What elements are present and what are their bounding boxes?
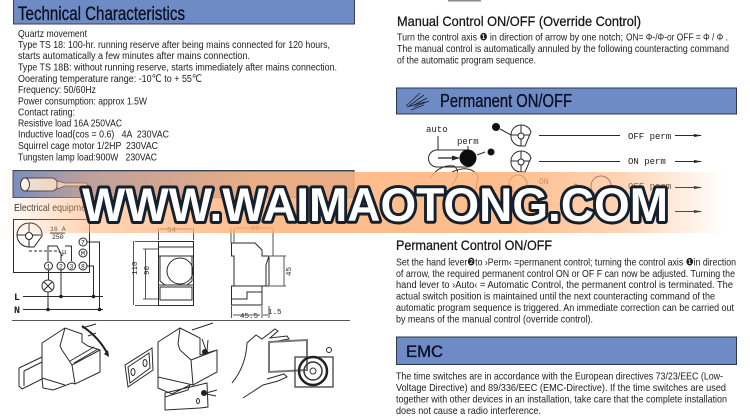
text block: specifications: Contact rating: bbox=[18, 106, 75, 118]
panel: manual control bbox=[397, 13, 729, 66]
panel: EMC bbox=[396, 337, 736, 417]
panel: electrical equipment bbox=[12, 170, 354, 410]
panel: permanent control bbox=[396, 237, 736, 326]
dimension drawing: side view: 1.5 bbox=[268, 309, 282, 317]
wiring diagram: N bbox=[14, 306, 20, 317]
text block: specifications: Quartz movement bbox=[18, 28, 87, 40]
dimension drawing: side view: 45 bbox=[286, 266, 294, 276]
text block: manual control bbox=[397, 32, 729, 66]
heading bar: EMC: EMC bbox=[406, 342, 443, 361]
icon: hatch hand bbox=[406, 93, 429, 110]
watermark band bbox=[0, 172, 725, 233]
wiring diagram: 7 bbox=[81, 240, 85, 246]
panel: permanent on/off bbox=[396, 88, 736, 213]
divider bbox=[12, 320, 350, 322]
wiring diagram: 250 bbox=[52, 234, 64, 241]
heading bar: permanent on/off: Permanent ON/OFF bbox=[440, 91, 572, 111]
dimension drawing: front view: 110 bbox=[132, 261, 140, 275]
diagram: hand lever positions: ON perm bbox=[628, 157, 666, 167]
text block: permanent control: by means of the manual control (override control). bbox=[396, 314, 593, 326]
dimension drawing: front view: 90 bbox=[144, 265, 152, 275]
wiring diagram: M bbox=[81, 250, 85, 258]
illustration: mounting on rail bbox=[19, 324, 109, 390]
diagram: hand lever positions: OFF perm bbox=[628, 132, 671, 142]
heading bar: EMC bbox=[396, 337, 736, 364]
dimension drawing: side view bbox=[231, 225, 294, 321]
wiring diagram: 8 bbox=[81, 264, 85, 270]
text block: specifications: Tungsten lamp load:900W 230VAC bbox=[18, 152, 157, 164]
text block: specifications: Type TS 18B: without running reserve, starts immediately after mains connection. bbox=[18, 62, 337, 74]
illustration: plug-in module bbox=[125, 323, 217, 410]
heading: permanent control: Permanent Control ON/OFF bbox=[396, 237, 552, 253]
panel: technical characteristics bbox=[14, 0, 354, 164]
wiring diagram: 3 bbox=[70, 264, 74, 270]
diagram: hand lever positions: OFF perm bbox=[628, 182, 671, 192]
text block: specifications: Inductive load(cos = 0.6) 4A 230VAC bbox=[18, 128, 169, 140]
text block: EMC: does not cause a radio interference. bbox=[396, 405, 541, 417]
text block: specifications: starts automatically a few minutes after mains connection. bbox=[18, 50, 250, 62]
text block: permanent control bbox=[396, 256, 736, 326]
wiring diagram: 1 bbox=[46, 264, 50, 270]
text block: manual control: of the automatic program sequence. bbox=[397, 54, 536, 66]
heading bar: electrical equipment bbox=[13, 170, 354, 198]
diagram: hand lever positions: auto bbox=[426, 125, 448, 135]
heading: technical characteristics: Technical Characteristics bbox=[18, 3, 185, 25]
icon: screwdriver bbox=[20, 178, 88, 191]
heading bar: permanent on/off bbox=[396, 88, 736, 114]
text block: specifications: Resistive load 16A 250VAC bbox=[18, 118, 122, 130]
text block: specifications: Frequency: 50/60Hz bbox=[18, 84, 96, 96]
text block: specifications: Ooerating temperature range: -10℃ to + 55℃ bbox=[18, 73, 202, 85]
dimension drawing: front view bbox=[132, 227, 194, 306]
dimension drawing: front view: 54 bbox=[167, 227, 177, 235]
diagram: hand lever positions: perm bbox=[457, 137, 479, 147]
fragment of upper panel edge bbox=[448, 0, 481, 2]
diagram: hand lever positions: ON bbox=[539, 178, 549, 187]
text block: specifications: Type TS 18: 100-hr. running reserve after being mains connected for 120 hours, bbox=[18, 39, 330, 51]
text block: specifications: Power consumption: approx 1.5W bbox=[18, 96, 147, 108]
wiring diagram bbox=[14, 220, 103, 317]
watermark text: WWW.WAIMAOTONG.COM bbox=[82, 178, 668, 231]
wiring diagram: μ bbox=[62, 249, 66, 257]
text: electrical equipment: Electrical equipme bbox=[14, 202, 86, 214]
dimension drawing: side view: 60 bbox=[251, 225, 261, 233]
dimension drawing: side view: 45.5 bbox=[240, 313, 259, 321]
heading: technical characteristics bbox=[14, 0, 354, 25]
wiring diagram: 16 A bbox=[50, 226, 66, 233]
text block: manual control: Turn the control axis ❶ in direction of arrow by one notch; bbox=[397, 32, 623, 44]
text block: EMC bbox=[396, 370, 727, 417]
diagram: hand lever positions bbox=[426, 123, 702, 213]
heading: manual control: Manual Control ON/OFF (Override Control) bbox=[397, 13, 641, 29]
text block: specifications: Squirrel cage motor 1/2HP 230VAC bbox=[18, 140, 158, 152]
wiring diagram: 2 bbox=[59, 264, 63, 270]
wiring diagram: L bbox=[14, 293, 20, 304]
text block: specifications bbox=[18, 28, 337, 164]
illustration: hand inserting card bbox=[232, 329, 333, 398]
